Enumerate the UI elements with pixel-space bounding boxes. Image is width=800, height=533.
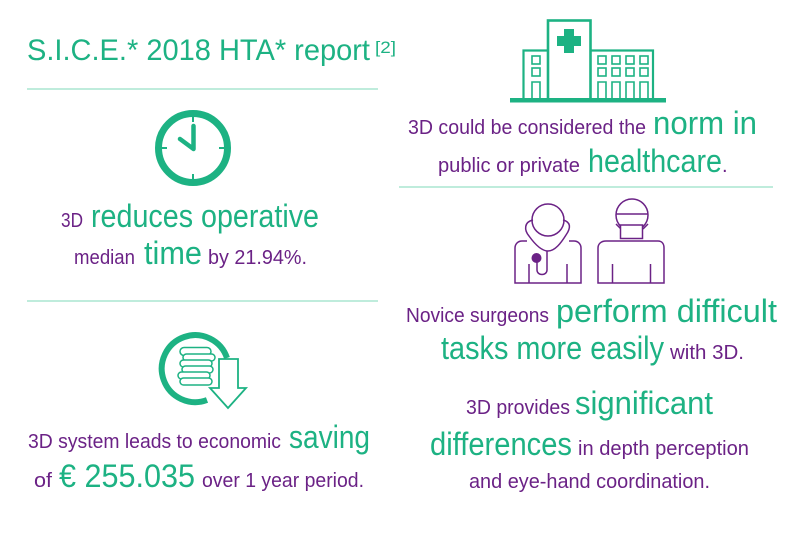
title: [2] — [375, 38, 396, 57]
text: operative time — [61, 198, 319, 271]
text: depth perception: in depth perception — [578, 438, 749, 460]
text: operative time: time — [144, 235, 202, 271]
text: operative time: reduces operative — [91, 198, 319, 234]
icon: surgeon with mask — [598, 199, 664, 283]
title: S.I.C.E.* 2018 HTA* report — [27, 34, 371, 67]
text: novice surgeons: with 3D. — [669, 342, 744, 364]
icon: coins with down arrow — [162, 335, 246, 408]
text: norm in healthcare: public or private — [438, 155, 580, 177]
text: depth perception: and eye-hand coordination. — [469, 471, 710, 493]
text: norm in healthcare: 3D could be considered the — [408, 117, 646, 139]
text: depth perception: 3D provides — [466, 397, 570, 419]
text: economic saving: € 255.035 — [59, 458, 195, 494]
icon: surgeon with stethoscope — [515, 204, 581, 283]
icon: clock — [158, 114, 228, 182]
text: operative time: by 21.94%. — [208, 247, 307, 269]
text: economic saving: 3D system leads to economic — [28, 431, 281, 453]
text: norm in healthcare — [408, 105, 757, 179]
text: norm in healthcare: norm in — [653, 105, 757, 141]
text: depth perception: differences — [430, 426, 572, 462]
icon: surgeons — [515, 199, 664, 283]
text: novice surgeons: perform difficult — [556, 293, 777, 329]
text: operative time: median — [74, 247, 135, 269]
text: norm in healthcare: healthcare — [588, 143, 722, 179]
icon: hospital — [510, 20, 666, 102]
text: novice surgeons — [406, 293, 777, 366]
text: operative time: 3D — [61, 210, 83, 232]
icon: down arrow — [210, 359, 246, 408]
text: economic saving — [28, 419, 370, 494]
text: depth perception: significant — [575, 385, 713, 421]
text: novice surgeons: Novice surgeons — [406, 305, 549, 327]
text: novice surgeons: tasks more easily — [441, 330, 664, 366]
text: depth perception — [430, 385, 749, 493]
text: economic saving: saving — [289, 419, 370, 455]
text: norm in healthcare: . — [722, 155, 728, 177]
text: economic saving: of — [34, 470, 52, 492]
text: economic saving: over 1 year period. — [202, 470, 364, 492]
